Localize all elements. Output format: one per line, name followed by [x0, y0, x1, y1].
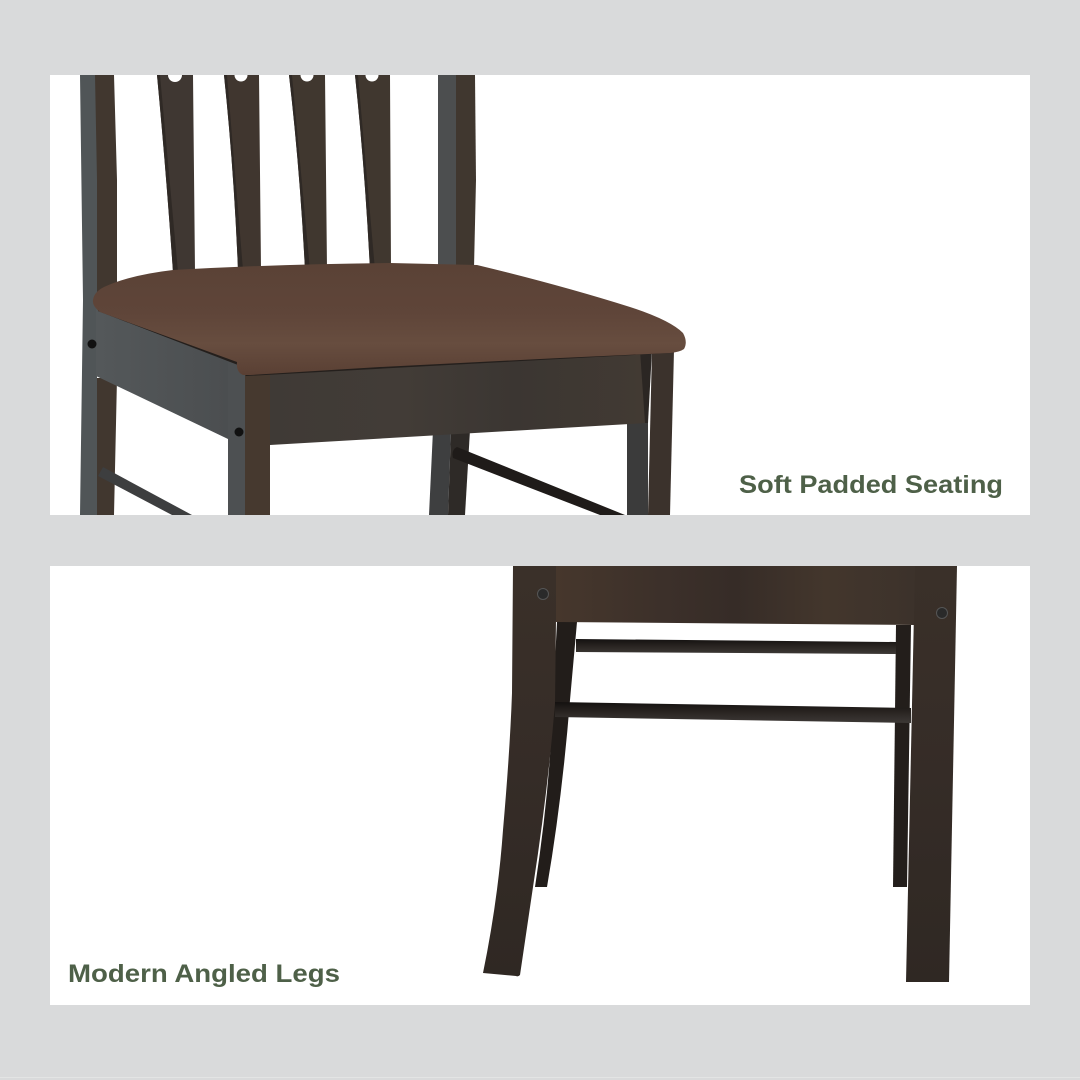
front apron shadow [640, 350, 652, 423]
right back post brown face [456, 75, 476, 268]
front right leg [648, 350, 674, 515]
rear left leg [535, 622, 577, 887]
backrest slats [157, 68, 391, 272]
left stretcher rail [98, 467, 192, 515]
rear right leg [893, 625, 911, 887]
right back post [438, 75, 456, 268]
left back post [80, 75, 117, 515]
panel: modern angled legs [50, 566, 1030, 1005]
apron [556, 566, 915, 625]
seat underside shadow [98, 306, 670, 376]
rear right leg [429, 430, 470, 515]
right stretcher rail [452, 447, 625, 515]
front left leg [228, 355, 270, 515]
screws [88, 340, 244, 436]
front apron [270, 350, 647, 445]
label: modern angled legs: Modern Angled Legs [68, 960, 340, 988]
right front leg [906, 566, 957, 982]
lower stretcher [555, 702, 911, 723]
seat cushion [93, 263, 686, 375]
upper stretcher [576, 639, 896, 654]
label: soft padded seating: Soft Padded Seating [739, 471, 1003, 499]
left front leg [483, 566, 556, 976]
rear front leg shadow face [627, 420, 648, 515]
photo: chair seat and backrest [80, 68, 686, 515]
screws [538, 588, 948, 618]
side apron [96, 305, 228, 439]
panel: soft padded seating [50, 68, 1030, 515]
photo: chair legs [483, 566, 957, 982]
